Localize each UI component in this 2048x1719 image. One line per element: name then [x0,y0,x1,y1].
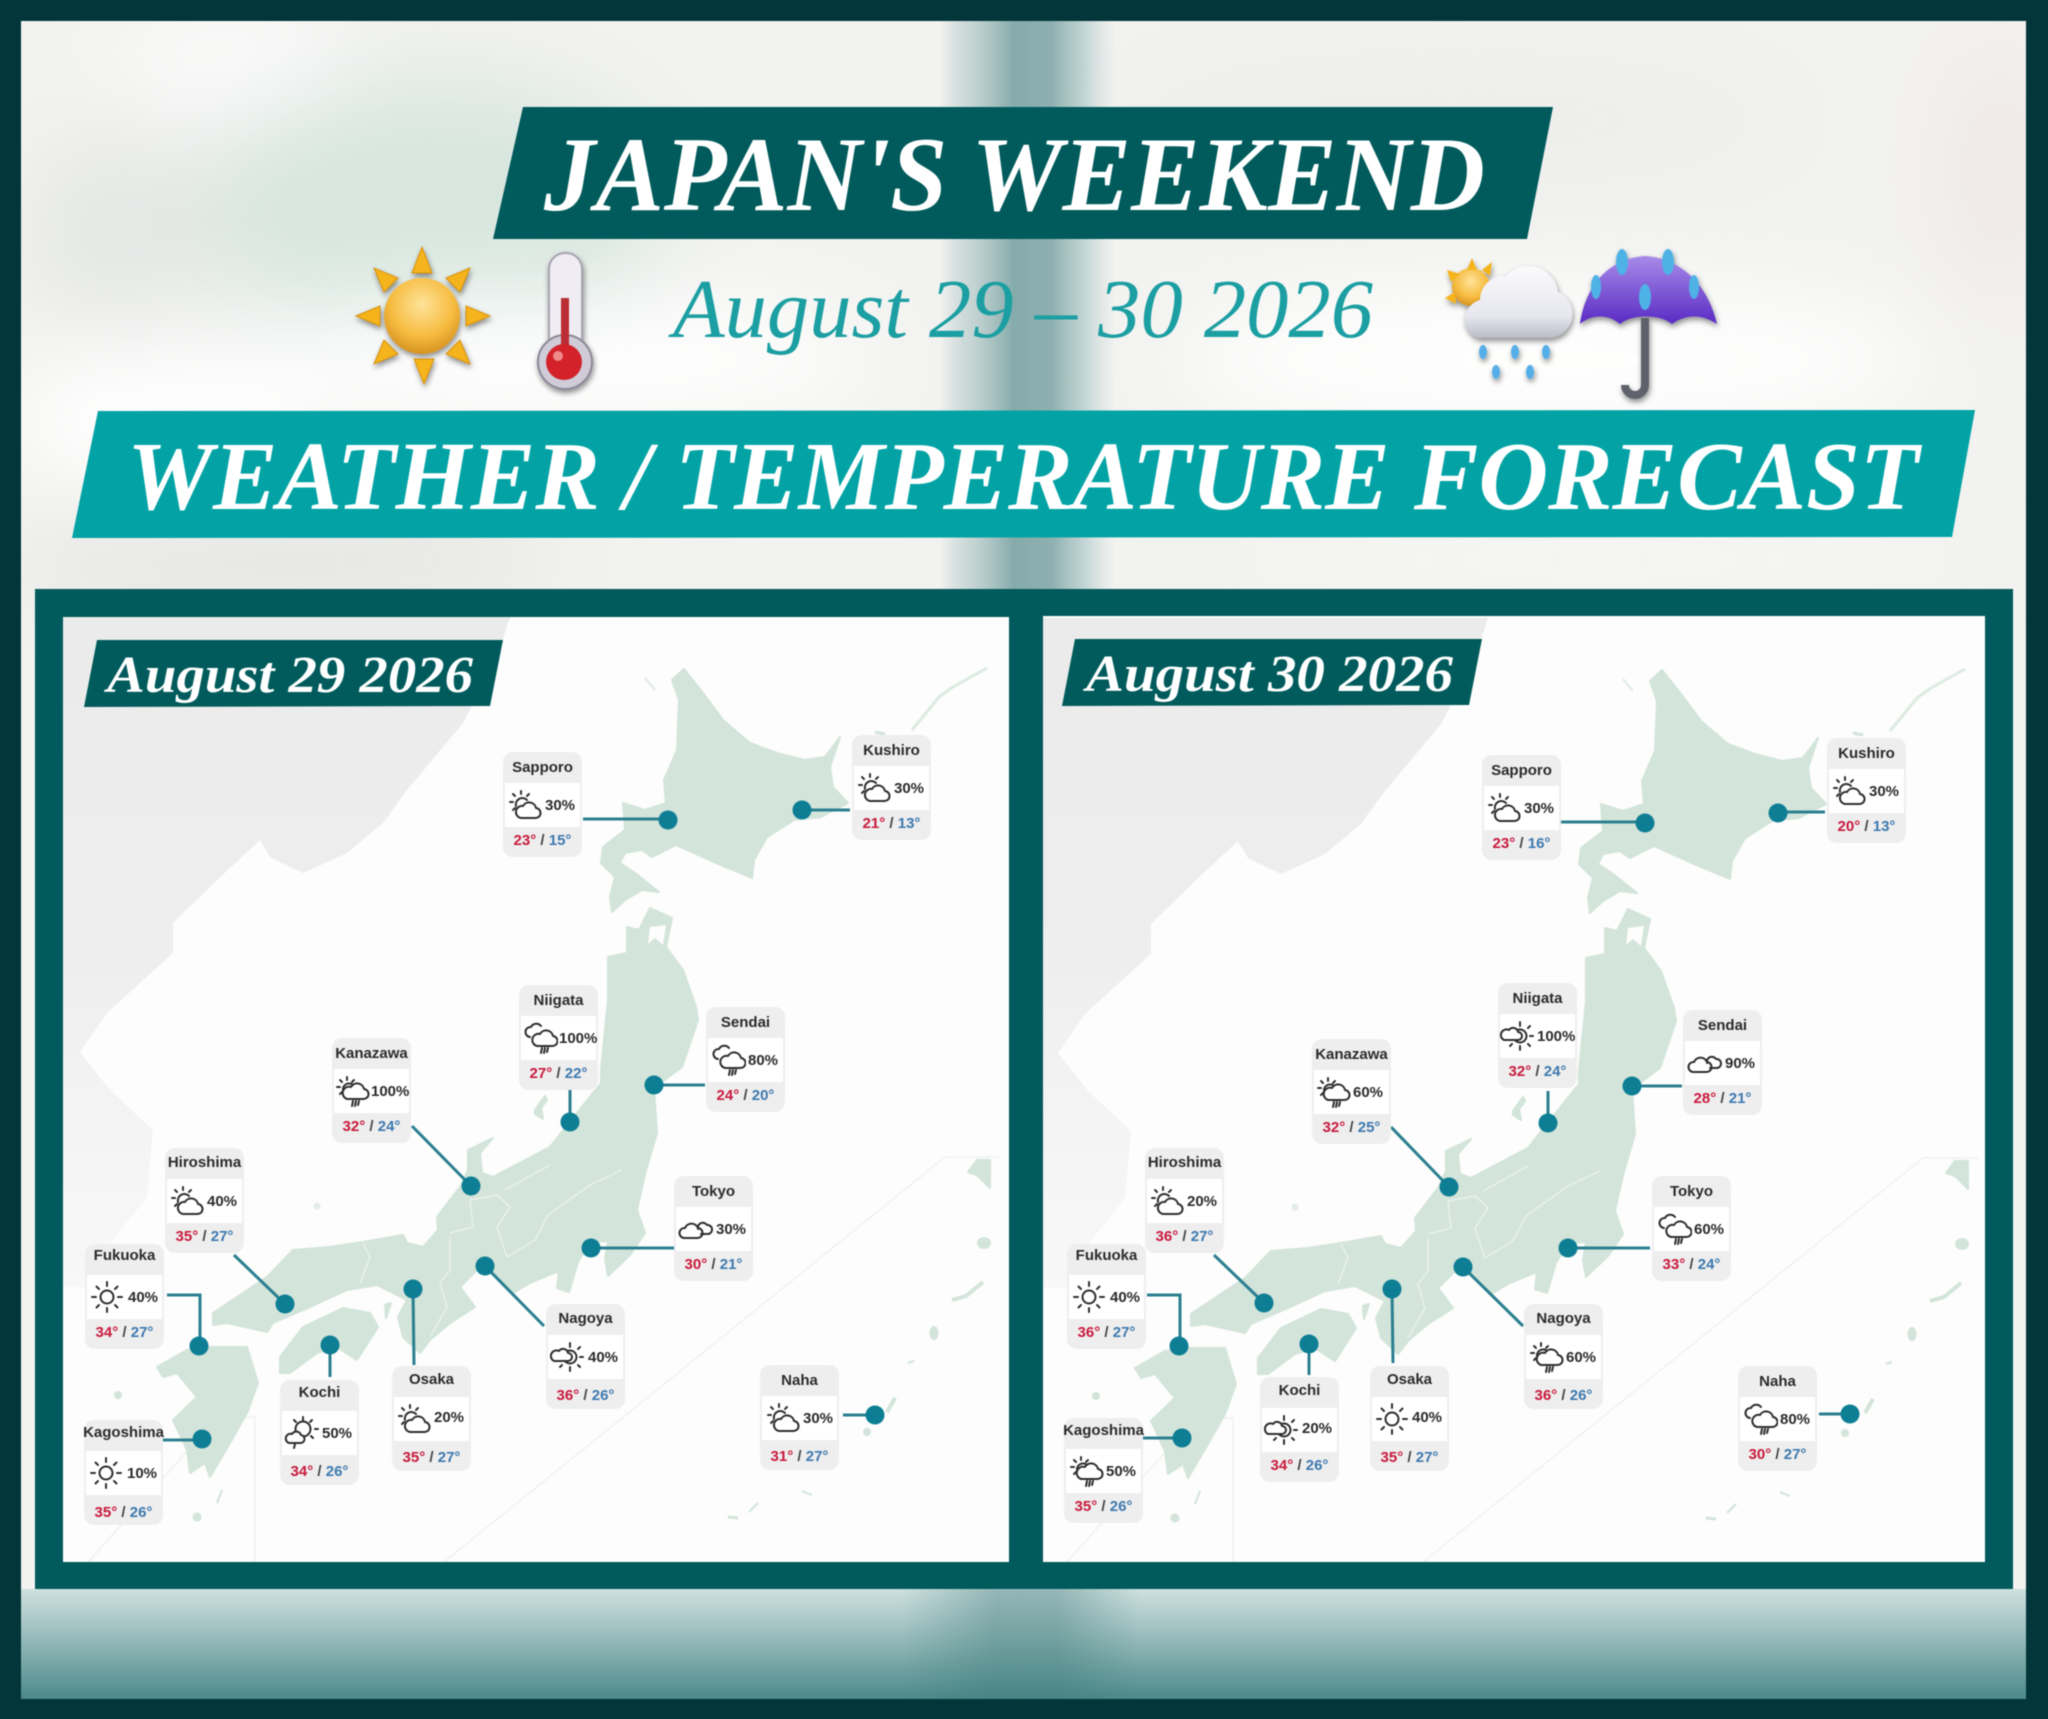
card: Sapporo Aug 30: Sapporo [1491,762,1552,779]
subtitle banner: Weather / Temperature Forecast: WEATHER / TEMPERATURE FORECAST [127,423,1923,531]
icon: thermometer emoji [538,253,592,389]
card: Sendai Aug 29: 80% [748,1052,778,1069]
card: Fukuoka Aug 30 [1067,1244,1146,1349]
card: Kushiro Aug 30 [1827,738,1906,843]
card: Nagoya Aug 30: 36° / 26° [1535,1387,1592,1404]
card: Hiroshima Aug 30: 20% [1187,1193,1217,1210]
card: Kochi Aug 30: 34° / 26° [1271,1457,1328,1474]
date banner: August 30 2026 [1062,639,1482,706]
card: Kanazawa Aug 30 [1312,1039,1391,1144]
card: Sapporo Aug 30 [1482,755,1561,860]
card: Kochi Aug 29 [280,1380,359,1485]
card: Sapporo Aug 29: Sapporo [512,759,573,776]
card: Nagoya Aug 29: 36° / 26° [557,1387,614,1404]
map of Japan, August 30 [1041,618,1978,1563]
date banner: August 29 2026 [84,640,503,707]
connector pins, August 30 [1143,804,1860,1448]
card: Osaka Aug 30: Osaka [1387,1371,1433,1388]
card: Kushiro Aug 29: 30% [894,780,924,797]
card: Naha Aug 30: Naha [1759,1373,1796,1390]
card: Nagoya Aug 30 [1524,1304,1603,1409]
card: Osaka Aug 30: 40% [1412,1409,1442,1426]
card: Sendai Aug 29 [706,1007,785,1112]
card: Kanazawa Aug 29: 100% [371,1083,409,1100]
card: Niigata Aug 29 [519,985,598,1090]
date range script text: August 29 – 30 2026 [668,263,1373,356]
connector pins, August 29 [163,800,884,1448]
card: Sapporo Aug 29 [503,752,582,857]
card: Kanazawa Aug 29: 32° / 24° [343,1118,400,1135]
card: Hiroshima Aug 29: Hiroshima [168,1154,242,1171]
card: Sendai Aug 29: 24° / 20° [717,1087,774,1104]
card: Kushiro Aug 29: Kushiro [863,742,920,759]
card: Naha Aug 29: 30% [803,1410,833,1427]
card: Kagoshima Aug 29 [83,1420,165,1525]
date banner: August 29 2026: August 29 2026 [104,647,473,704]
card: Naha Aug 29 [760,1365,839,1470]
card: Osaka Aug 30: 35° / 27° [1381,1449,1438,1466]
card: Tokyo Aug 30: 60% [1694,1221,1724,1238]
card: Niigata Aug 30: Niigata [1512,990,1563,1007]
card: Sendai Aug 30 [1683,1010,1762,1115]
card: Naha Aug 30 [1738,1366,1817,1471]
card: Fukuoka Aug 29: Fukuoka [94,1247,156,1264]
card: Kushiro Aug 29: 21° / 13° [863,815,920,832]
icon: sun behind rain cloud emoji [1445,258,1572,379]
card: Kochi Aug 30 [1260,1377,1339,1482]
card: Kanazawa Aug 30: Kanazawa [1315,1046,1388,1063]
maps outer frame [35,589,2013,1589]
card: Fukuoka Aug 29 [85,1244,164,1349]
card: Tokyo Aug 29: Tokyo [692,1183,735,1200]
card: Fukuoka Aug 30: 40% [1110,1289,1140,1306]
card: Sendai Aug 30: 90% [1725,1055,1755,1072]
card: Hiroshima Aug 29 [165,1148,244,1253]
card: Kushiro Aug 29 [852,735,931,840]
card: Nagoya Aug 29: Nagoya [558,1310,613,1327]
card: Sapporo Aug 29: 23° / 15° [514,832,571,849]
card: Niigata Aug 30 [1498,983,1577,1088]
card: Kochi Aug 29: Kochi [299,1384,340,1401]
card: Nagoya Aug 30: Nagoya [1536,1310,1591,1327]
card: Nagoya Aug 29 [546,1304,625,1409]
card: Niigata Aug 30: 100% [1537,1028,1575,1045]
card: Kagoshima Aug 29: 10% [127,1465,157,1482]
card: Nagoya Aug 30: 60% [1566,1349,1596,1366]
card: Hiroshima Aug 30 [1145,1148,1224,1253]
panel: August 30 map [1041,616,1985,1563]
card: Niigata Aug 30: 32° / 24° [1509,1063,1566,1080]
card: Fukuoka Aug 29: 34° / 27° [96,1324,153,1341]
card: Osaka Aug 29: Osaka [409,1371,455,1388]
card: Kushiro Aug 30: 20° / 13° [1838,818,1895,835]
card: Sendai Aug 30: 28° / 21° [1694,1090,1751,1107]
card: Fukuoka Aug 30: 36° / 27° [1078,1324,1135,1341]
card: Niigata Aug 29: 100% [559,1030,597,1047]
card: Naha Aug 29: Naha [781,1372,818,1389]
card: Sapporo Aug 30: 30% [1524,800,1554,817]
card: Kochi Aug 30: 20% [1302,1420,1332,1437]
icon: sun emoji [356,247,490,384]
card: Kochi Aug 30: Kochi [1279,1382,1320,1399]
card: Kagoshima Aug 29: Kagoshima [83,1424,165,1441]
card: Hiroshima Aug 29: 40% [207,1193,237,1210]
icon: umbrella with rain emoji [1580,249,1717,395]
card: Tokyo Aug 30: Tokyo [1670,1183,1713,1200]
date banner: August 30 2026: August 30 2026 [1083,646,1453,703]
card: Tokyo Aug 30: 33° / 24° [1663,1256,1720,1273]
card: Niigata Aug 29: 27° / 22° [530,1065,587,1082]
card: Naha Aug 30: 80% [1780,1411,1810,1428]
card: Kanazawa Aug 30: 60% [1353,1084,1383,1101]
card: Nagoya Aug 29: 40% [588,1349,618,1366]
card: Kushiro Aug 30: Kushiro [1838,745,1895,762]
card: Kagoshima Aug 30: Kagoshima [1063,1422,1145,1439]
card: Sendai Aug 29: Sendai [721,1014,770,1031]
card: Tokyo Aug 29: 30% [716,1221,746,1238]
card: Osaka Aug 30 [1370,1366,1449,1471]
card: Kagoshima Aug 30: 50% [1106,1463,1136,1480]
map of Japan, August 29 [63,617,1000,1562]
card: Osaka Aug 29: 20% [434,1409,464,1426]
card: Kanazawa Aug 29 [332,1038,411,1143]
card: Niigata Aug 29: Niigata [533,992,584,1009]
card: Kochi Aug 29: 50% [322,1425,352,1442]
card: Hiroshima Aug 30: 36° / 27° [1156,1228,1213,1245]
card: Kagoshima Aug 30: 35° / 26° [1075,1498,1132,1515]
card: Kagoshima Aug 30 [1063,1418,1145,1523]
card: Sapporo Aug 30: 23° / 16° [1493,835,1550,852]
card: Osaka Aug 29: 35° / 27° [403,1449,460,1466]
card: Kanazawa Aug 30: 32° / 25° [1323,1119,1380,1136]
card: Kushiro Aug 30: 30% [1869,783,1899,800]
card: Sapporo Aug 29: 30% [545,797,575,814]
card: Hiroshima Aug 29: 35° / 27° [176,1228,233,1245]
card: Naha Aug 30: 30° / 27° [1749,1446,1806,1463]
panel: August 29 map [63,617,1009,1562]
title banner: Japan's Weekend: JAPAN'S WEEKEND [543,116,1485,233]
card: Fukuoka Aug 29: 40% [128,1289,158,1306]
card: Kanazawa Aug 29: Kanazawa [335,1045,408,1062]
card: Sendai Aug 30: Sendai [1698,1017,1747,1034]
card: Tokyo Aug 30 [1652,1176,1731,1281]
card: Hiroshima Aug 30: Hiroshima [1148,1154,1222,1171]
card: Fukuoka Aug 30: Fukuoka [1076,1247,1138,1264]
card: Naha Aug 29: 31° / 27° [771,1448,828,1465]
card: Kochi Aug 29: 34° / 26° [291,1463,348,1480]
card: Osaka Aug 29 [392,1366,471,1471]
card: Tokyo Aug 29 [674,1176,753,1281]
card: Tokyo Aug 29: 30° / 21° [685,1256,742,1273]
card: Kagoshima Aug 29: 35° / 26° [95,1504,152,1521]
